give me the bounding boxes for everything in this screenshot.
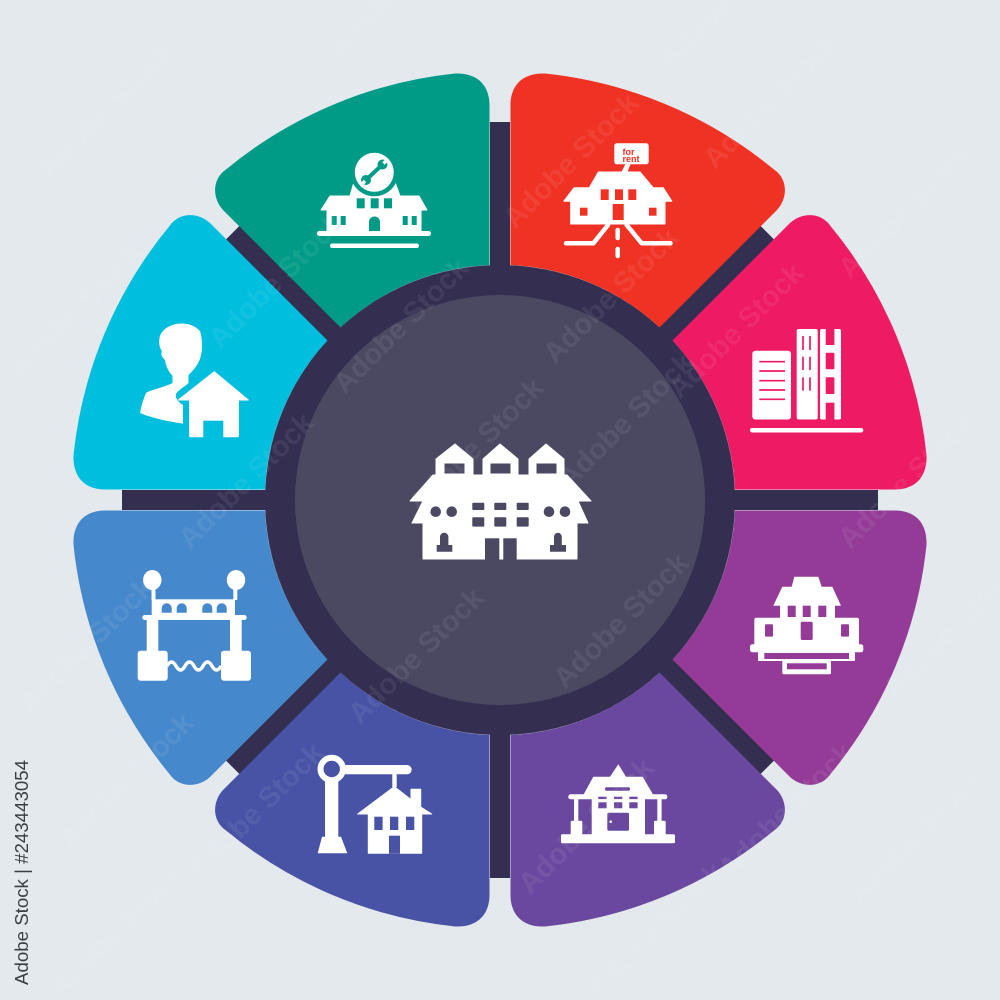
segment: red top right	[510, 73, 785, 327]
icon: cyan agent with house	[140, 323, 248, 438]
icon: pink office buildings	[750, 329, 863, 432]
watermark: Adobe Stock	[832, 136, 981, 285]
watermark: Adobe Stock	[327, 251, 476, 400]
watermark: Adobe Stock	[662, 256, 811, 405]
watermark: Adobe Stock	[842, 761, 991, 910]
watermark: Adobe Stock	[537, 221, 686, 370]
segment: violet bottom right	[510, 672, 785, 927]
center disc	[295, 295, 705, 705]
watermark: Adobe Stock	[202, 206, 351, 355]
segment: blue left lower	[73, 510, 327, 785]
segment: cyan left upper	[73, 215, 327, 490]
icon: green school building with wrench	[317, 148, 431, 248]
vertical stock credit: Adobe Stock | #243443054	[12, 760, 32, 985]
icon: blue bridge with lamps	[138, 570, 251, 681]
icon: purple mansion on platform	[750, 577, 863, 674]
watermark: Adobe Stock	[32, 36, 181, 185]
icon: red house for rent with road: rent	[622, 154, 640, 164]
icon: indigo hanging house sign	[318, 758, 432, 854]
segment: indigo bottom left	[215, 672, 490, 927]
watermark: Adobe Stock	[512, 751, 661, 900]
segment: green top left	[215, 73, 490, 327]
watermark: Adobe Stock	[52, 706, 201, 855]
watermark: Adobe Stock	[552, 346, 701, 495]
icon: red house for rent with road	[564, 144, 672, 256]
watermark: Adobe Stock	[547, 546, 696, 695]
watermark: Adobe Stock	[342, 581, 491, 730]
watermark: Adobe Stock	[712, 736, 861, 885]
watermark: Adobe Stock	[2, 236, 151, 385]
watermark: Adobe Stock	[497, 86, 646, 235]
watermark: Adobe Stock	[697, 26, 846, 175]
icon: violet porch house	[561, 764, 675, 843]
watermark: Adobe Stock	[12, 571, 161, 720]
watermark: Adobe Stock	[182, 736, 331, 885]
watermark: Adobe Stock	[402, 371, 551, 520]
segment: purple right lower	[672, 510, 927, 785]
dark cross spokes	[122, 122, 878, 878]
segment: pink right upper	[672, 215, 927, 490]
watermark: Adobe Stock	[832, 406, 981, 555]
center ring	[265, 265, 735, 735]
watermark: Adobe Stock	[172, 406, 321, 555]
icon: red house for rent with road: for	[622, 147, 635, 157]
icon: center townhouse with three turrets	[410, 444, 591, 560]
